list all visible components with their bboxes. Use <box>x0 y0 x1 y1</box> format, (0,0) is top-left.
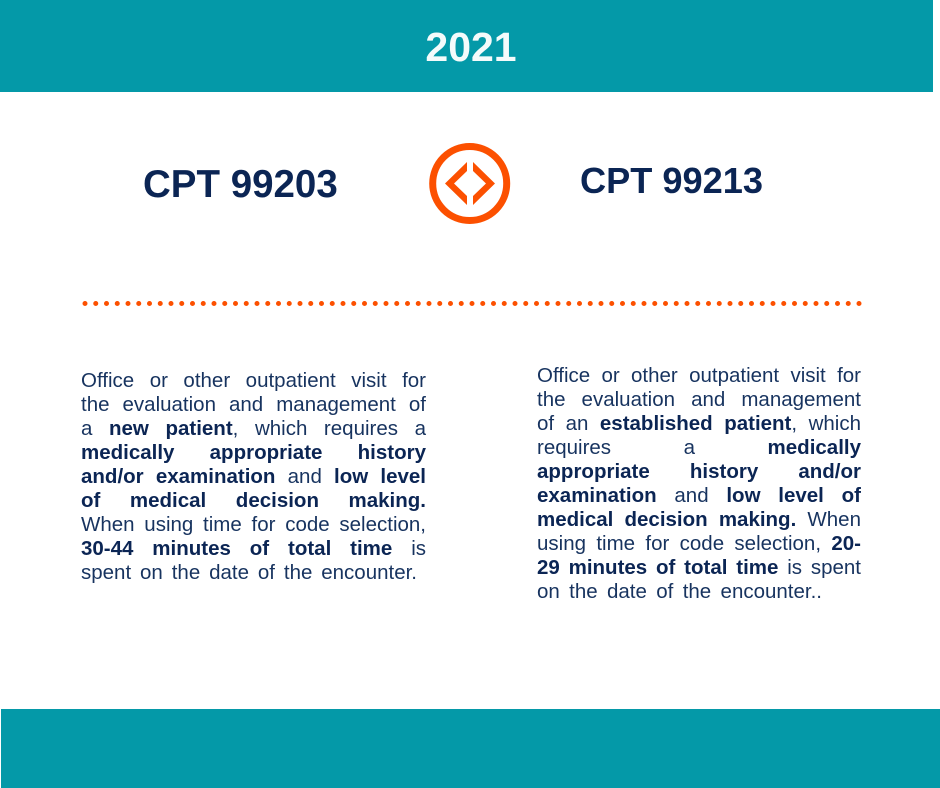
text block: CPT 99213 description: on the date of the encounter.. <box>537 580 822 603</box>
text block: CPT 99203 description: the evaluation and management of <box>81 393 426 416</box>
text block: CPT 99213 description: examination and low level of <box>537 484 861 507</box>
text block: CPT 99203 description: and/or examination and low level <box>81 465 426 488</box>
heading: CPT 99203: CPT 99203 <box>143 163 338 206</box>
text block: CPT 99203 description: of medical decision making. <box>81 489 426 512</box>
bottom banner <box>1 709 940 788</box>
dotted divider <box>82 301 862 306</box>
text block: CPT 99203 description <box>81 369 426 584</box>
top banner <box>0 0 933 92</box>
text block: CPT 99203 description: 30-44 minutes of total time is <box>81 537 426 560</box>
text block: CPT 99213 description: using time for code selection, 20- <box>537 532 861 555</box>
heading: CPT 99213: CPT 99213 <box>580 160 763 201</box>
text block: CPT 99213 description <box>537 364 861 603</box>
title: year: 2021 <box>425 24 517 70</box>
text block: CPT 99213 description: appropriate history and/or <box>537 460 861 483</box>
text block: CPT 99203 description: Office or other outpatient visit for <box>81 369 426 392</box>
text block: CPT 99203 description: medically appropriate history <box>81 441 426 464</box>
text block: CPT 99213 description: the evaluation and management <box>537 388 861 411</box>
text block: CPT 99213 description: 29 minutes of total time is spent <box>537 556 861 579</box>
text block: CPT 99213 description: medical decision making. When <box>537 508 861 531</box>
text block: CPT 99213 description: of an established patient, which <box>537 412 861 435</box>
text block: CPT 99213 description: requires a medically <box>537 436 861 459</box>
text block: CPT 99213 description: Office or other outpatient visit for <box>537 364 861 387</box>
text block: CPT 99203 description: When using time for code selection, <box>81 513 426 536</box>
text block: CPT 99203 description: spent on the date of the encounter. <box>81 561 417 584</box>
text block: CPT 99203 description: a new patient, which requires a <box>81 417 426 440</box>
icon: code comparison circle <box>429 143 510 224</box>
